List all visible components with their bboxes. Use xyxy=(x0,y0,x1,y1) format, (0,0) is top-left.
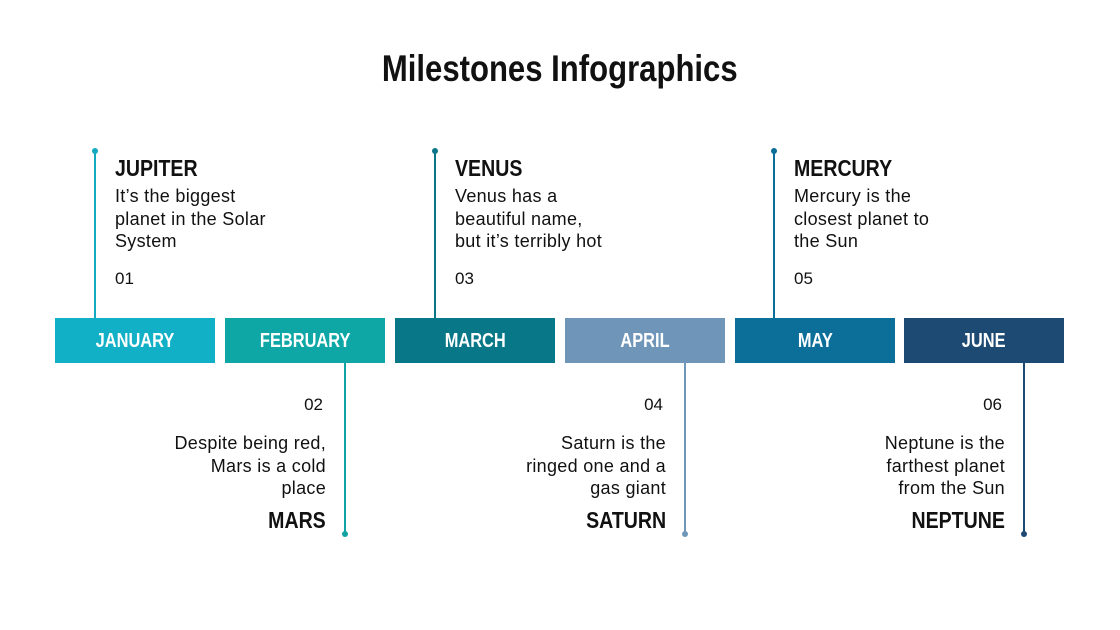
text: Mercury is the xyxy=(794,186,911,206)
text: farthest planet xyxy=(886,456,1005,476)
month: january: JANUARY xyxy=(96,330,174,352)
month: february xyxy=(225,318,385,363)
connector: neptune xyxy=(1023,363,1025,534)
milestone: neptune xyxy=(885,395,1005,532)
title: Milestones Infographics xyxy=(382,48,738,89)
connector: jupiter xyxy=(94,151,96,318)
text: ringed one and a xyxy=(526,456,666,476)
text: It’s the biggest xyxy=(115,186,236,206)
text xyxy=(885,433,1005,498)
text xyxy=(455,186,602,251)
heading: MERCURY xyxy=(794,155,892,181)
heading: NEPTUNE xyxy=(912,506,1005,532)
text xyxy=(794,186,929,251)
text: beautiful name, xyxy=(455,208,583,228)
connector: mars xyxy=(344,363,346,534)
text: from the Sun xyxy=(898,478,1005,498)
text: System xyxy=(115,231,177,251)
heading: VENUS xyxy=(455,155,522,181)
text: closest planet to xyxy=(794,208,929,228)
month: february: FEBRUARY xyxy=(260,330,350,352)
connector: mercury xyxy=(773,151,775,318)
month: january xyxy=(55,318,215,363)
text: Saturn is the xyxy=(561,433,666,453)
month: june xyxy=(904,318,1064,363)
month: april xyxy=(565,318,725,363)
dot: mars xyxy=(342,531,348,537)
month: march xyxy=(395,318,555,363)
number: 05 xyxy=(794,268,813,288)
number: 06 xyxy=(983,395,1002,414)
text: place xyxy=(281,478,326,498)
month: march: MARCH xyxy=(444,330,506,352)
dot: venus xyxy=(432,148,438,154)
dot: mercury xyxy=(771,148,777,154)
number: 03 xyxy=(455,268,474,288)
connector: saturn xyxy=(684,363,686,534)
dot: jupiter xyxy=(92,148,98,154)
text: the Sun xyxy=(794,231,858,251)
milestone: mercury xyxy=(794,155,929,288)
text: Mars is a cold xyxy=(211,456,326,476)
text xyxy=(526,433,666,498)
text: gas giant xyxy=(590,478,666,498)
month: may: MAY xyxy=(798,330,832,352)
month: april: APRIL xyxy=(620,330,670,352)
text: Venus has a xyxy=(455,186,557,206)
text: planet in the Solar xyxy=(115,208,266,228)
connector: venus xyxy=(434,151,436,318)
month: june: JUNE xyxy=(962,330,1006,352)
milestone: mars xyxy=(174,395,326,532)
month: may xyxy=(735,318,895,363)
number: 04 xyxy=(644,395,663,414)
text: but it’s terribly hot xyxy=(455,231,602,251)
milestone: venus xyxy=(455,155,602,288)
heading: SATURN xyxy=(586,506,666,532)
dot: neptune xyxy=(1021,531,1027,537)
milestone: jupiter xyxy=(115,155,266,288)
heading: MARS xyxy=(268,506,326,532)
text: Neptune is the xyxy=(885,433,1005,453)
text: Despite being red, xyxy=(174,433,326,453)
text xyxy=(174,433,326,498)
text xyxy=(115,186,266,251)
dot: saturn xyxy=(682,531,688,537)
milestone: saturn xyxy=(526,395,666,532)
number: 02 xyxy=(304,395,323,414)
number: 01 xyxy=(115,268,134,288)
heading: JUPITER xyxy=(115,155,198,181)
